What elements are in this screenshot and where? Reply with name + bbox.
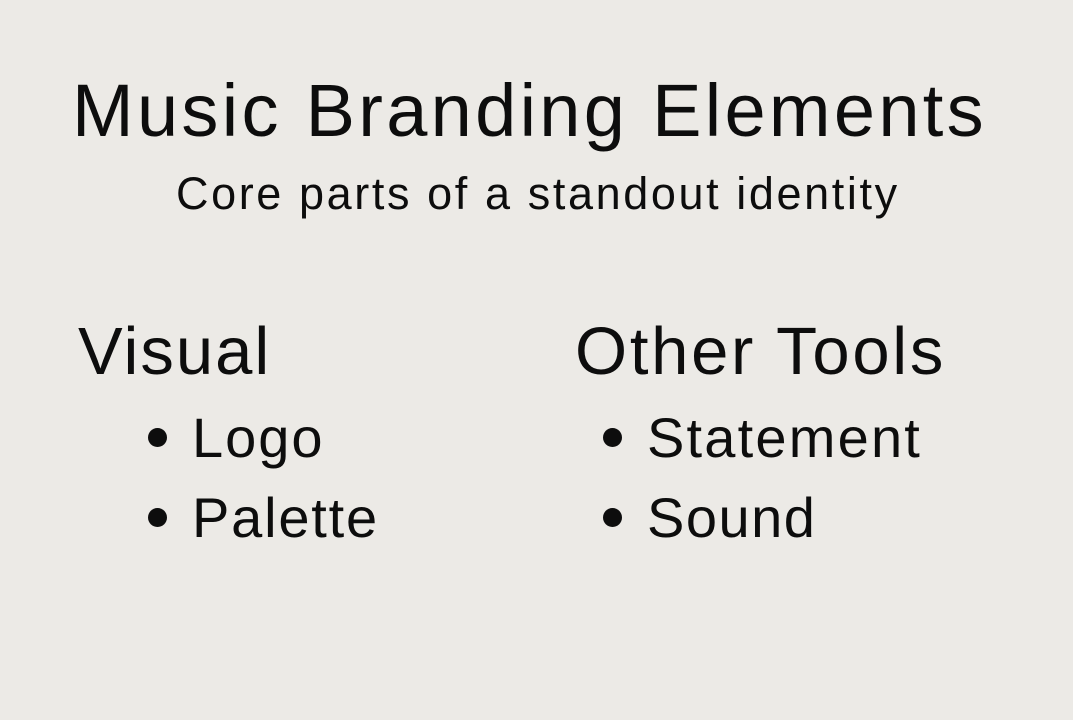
bullet: statement: Statement xyxy=(647,406,922,469)
bullet: sound: Sound xyxy=(647,486,816,549)
heading: other tools: Other Tools xyxy=(575,314,946,389)
panel: other tools xyxy=(575,314,946,549)
panel: visual xyxy=(78,314,379,549)
bullet: logo: Logo xyxy=(192,406,325,469)
bullet: palette: Palette xyxy=(192,486,379,549)
title: Music Branding Elements xyxy=(72,69,987,152)
heading: visual: Visual xyxy=(78,314,271,389)
subtitle: Core parts of a standout identity xyxy=(176,168,900,219)
